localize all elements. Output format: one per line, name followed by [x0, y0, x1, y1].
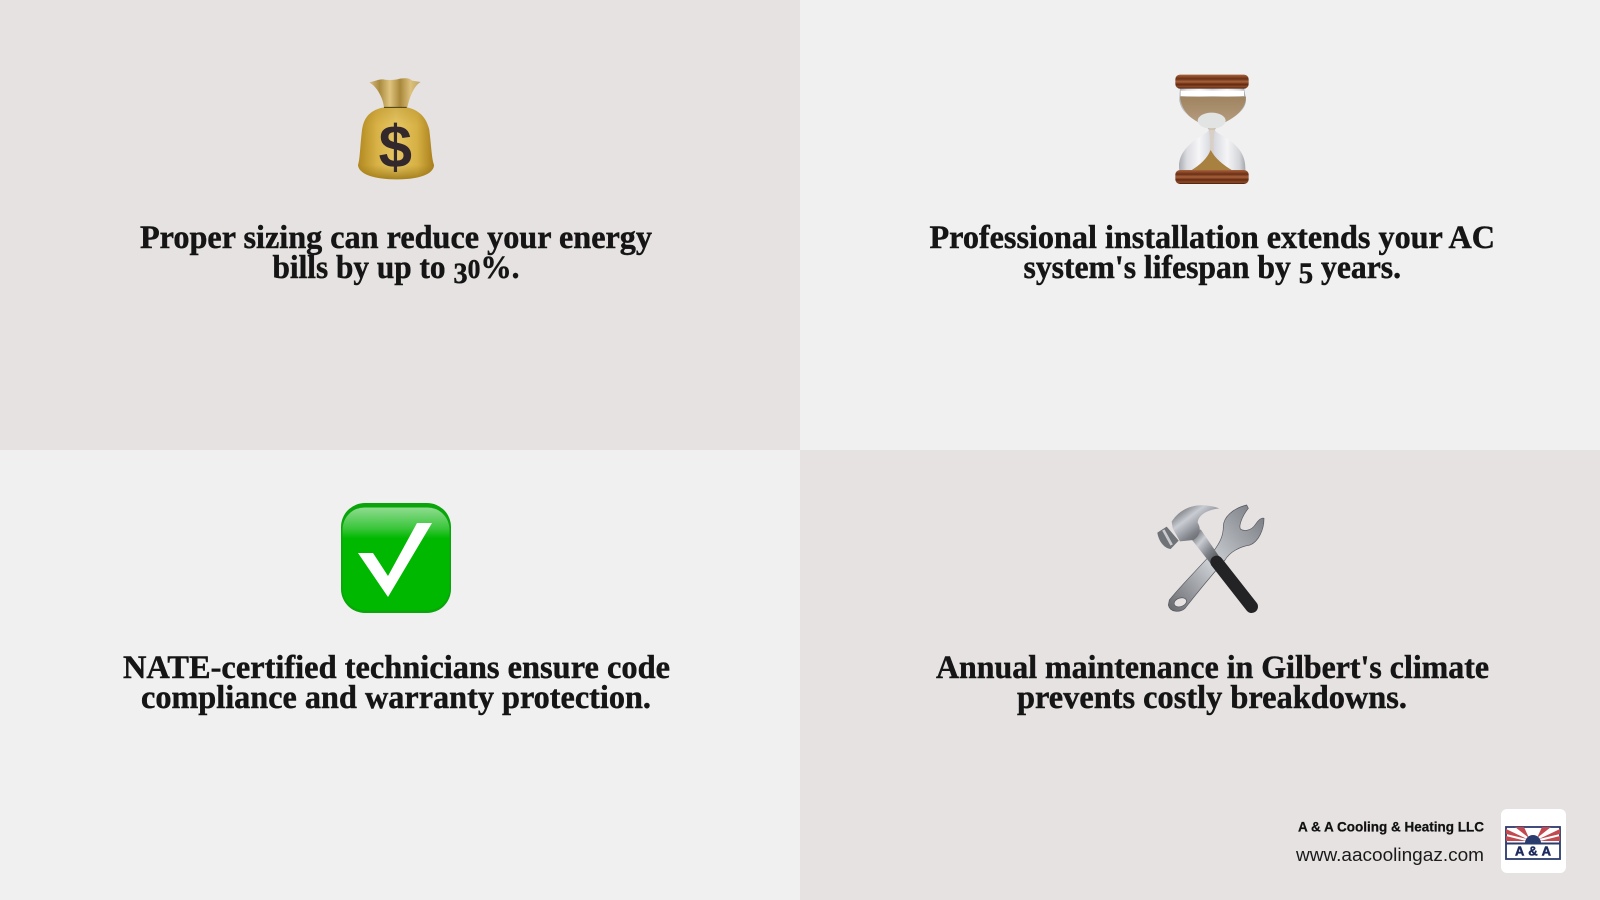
heading: professional installation: 5 [1299, 257, 1313, 290]
heading: certified technicians: compliance and warranty protection. [141, 680, 651, 716]
heading: certified technicians [123, 650, 670, 716]
heading: professional installation: years. [1321, 250, 1404, 286]
heading: annual maintenance [936, 650, 1489, 716]
logo badge [1501, 809, 1566, 873]
logo badge: A&A [1515, 844, 1552, 858]
heading: proper sizing [140, 220, 652, 290]
icon: money bag [358, 78, 434, 180]
icon: hourglass [1175, 75, 1249, 184]
icon: check mark [341, 503, 451, 613]
heading: proper sizing: Proper sizing can reduce your energy [140, 220, 652, 256]
heading: professional installation: system's lifespan by [1024, 250, 1302, 286]
heading: proper sizing: bills by up to [272, 250, 455, 286]
panel: certified technicians [0, 450, 800, 900]
icon: hammer and wrench [1157, 505, 1264, 611]
brand footer [1295, 809, 1566, 873]
heading: proper sizing: 3 [453, 257, 468, 290]
website: www.aacoolingaz.com [1295, 845, 1484, 865]
heading: proper sizing: %. [480, 250, 522, 286]
heading: professional installation: Professional installation extends your AC [930, 220, 1495, 256]
heading: certified technicians: NATE-certified technicians ensure code [123, 650, 670, 686]
panel: professional installation [800, 0, 1600, 450]
company name: A & A Cooling & Heating LLC [1298, 818, 1484, 834]
panel: proper sizing [0, 0, 800, 450]
heading: proper sizing: 0 [468, 254, 480, 284]
heading: annual maintenance: Annual maintenance in Gilbert's climate [936, 650, 1489, 686]
heading: annual maintenance: prevents costly breakdowns. [1017, 680, 1407, 716]
panel: annual maintenance [800, 450, 1600, 900]
heading: professional installation [930, 220, 1495, 290]
icon: money bag: $ [379, 113, 412, 180]
